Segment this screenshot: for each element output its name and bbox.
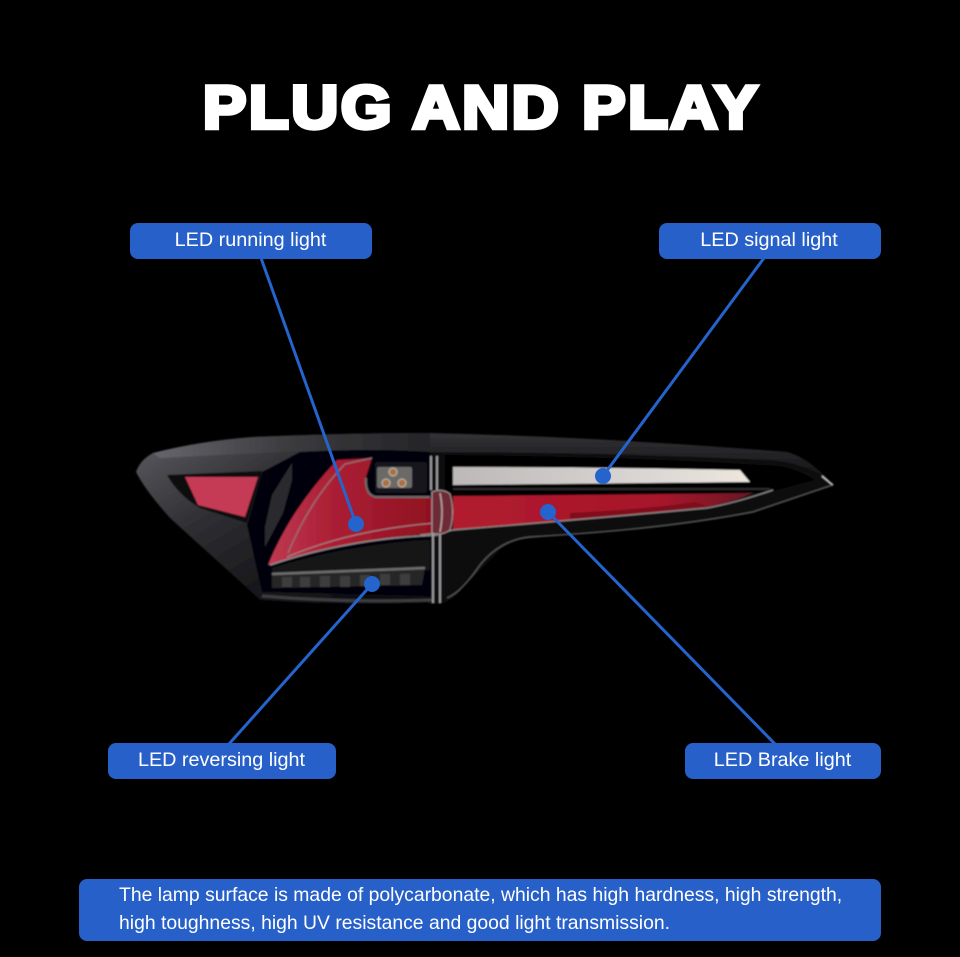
label: LED reversing light: LED reversing light — [138, 749, 306, 771]
brake light red strip — [453, 493, 753, 530]
lower clear edge of blade — [447, 485, 833, 598]
silver trim lines — [287, 523, 435, 557]
dot: brake light — [540, 504, 556, 520]
top band, inner — [430, 433, 825, 477]
reversing light strip — [272, 568, 425, 588]
amber signal module — [375, 462, 427, 493]
red side reflector — [185, 477, 258, 517]
grey bar below white strip — [453, 488, 770, 490]
line: LED signal light — [603, 258, 764, 476]
tip highlight — [822, 476, 833, 485]
label: LED running light: LED running light — [175, 229, 327, 251]
label: LED running light — [130, 223, 372, 259]
label: LED Brake light: LED Brake light — [714, 749, 852, 771]
line: LED running light — [261, 258, 356, 524]
lamp body: inner blade section — [428, 433, 833, 604]
dot: running light — [348, 516, 364, 532]
black upper recess of blade — [445, 455, 815, 500]
top band, outer — [153, 433, 430, 458]
bottom clear edge — [262, 596, 432, 601]
tail light illustration — [136, 433, 833, 604]
description panel: The lamp surface is made of polycarbonate, which has high hardness, high strength, — [119, 884, 842, 906]
description panel: high toughness, high UV resistance and good light transmission. — [119, 912, 670, 934]
running light red panel — [268, 458, 435, 565]
lamp body: outer section — [136, 433, 432, 604]
black recess around lens cluster — [247, 450, 432, 596]
title: PLUG AND PLAY — [203, 74, 760, 141]
dot: reversing light — [364, 576, 380, 592]
lens mesh below running light — [272, 540, 430, 575]
label: LED signal light — [659, 223, 881, 259]
callout lines and dots — [229, 258, 775, 744]
label: LED reversing light — [108, 743, 336, 779]
glossy black fin — [265, 463, 292, 547]
line: LED Brake light — [548, 512, 775, 744]
description panel — [79, 879, 881, 941]
label: LED signal light: LED signal light — [700, 229, 838, 251]
white signal strip — [453, 467, 750, 485]
clear centre divider — [431, 456, 452, 603]
line: LED reversing light — [229, 584, 372, 744]
dot: signal light — [595, 468, 611, 484]
reflector housing — [167, 471, 262, 523]
label: LED Brake light — [685, 743, 881, 779]
